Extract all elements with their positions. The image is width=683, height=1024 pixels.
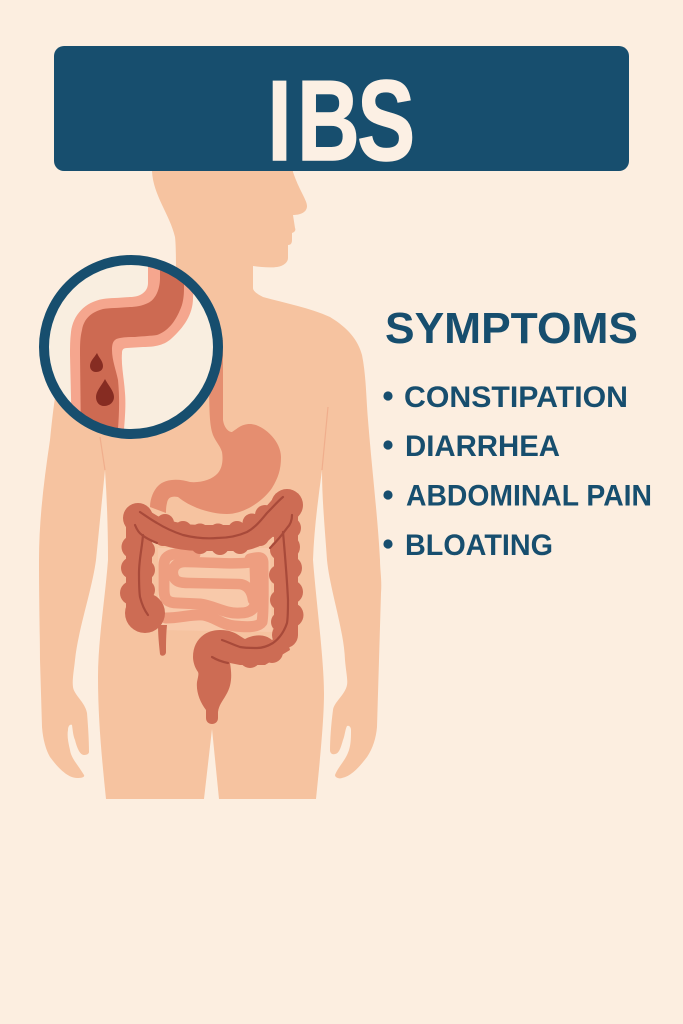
infographic canvas — [39, 46, 650, 799]
colon fold lines — [135, 497, 292, 663]
appendix — [158, 625, 167, 656]
large intestine (colon) — [120, 489, 304, 724]
symptom: abdominal pain: ABDOMINAL PAIN — [406, 480, 652, 512]
arm crease lines — [100, 407, 328, 470]
human body silhouette — [39, 165, 381, 799]
small intestine — [158, 548, 272, 632]
descending colon — [269, 505, 304, 648]
bowel lumen — [80, 270, 184, 428]
title banner — [54, 46, 629, 185]
symptom: diarrhea: DIARRHEA — [405, 430, 560, 463]
symptom: constipation: CONSTIPATION — [404, 381, 628, 414]
blood drop large — [96, 379, 114, 406]
symptoms heading: SYMPTOMS — [385, 304, 638, 353]
transverse colon — [123, 489, 303, 555]
symptoms list — [383, 381, 652, 562]
symptom: bloating: BLOATING — [405, 529, 553, 562]
stomach and esophagus — [150, 340, 281, 514]
magnifier circle: bleeding bowel close-up — [44, 250, 218, 440]
blood drop small — [90, 353, 103, 372]
title: IBS — [268, 58, 415, 185]
sigmoid colon and rectum — [193, 630, 290, 724]
ascending colon — [120, 525, 165, 633]
bowel wall — [70, 266, 194, 429]
